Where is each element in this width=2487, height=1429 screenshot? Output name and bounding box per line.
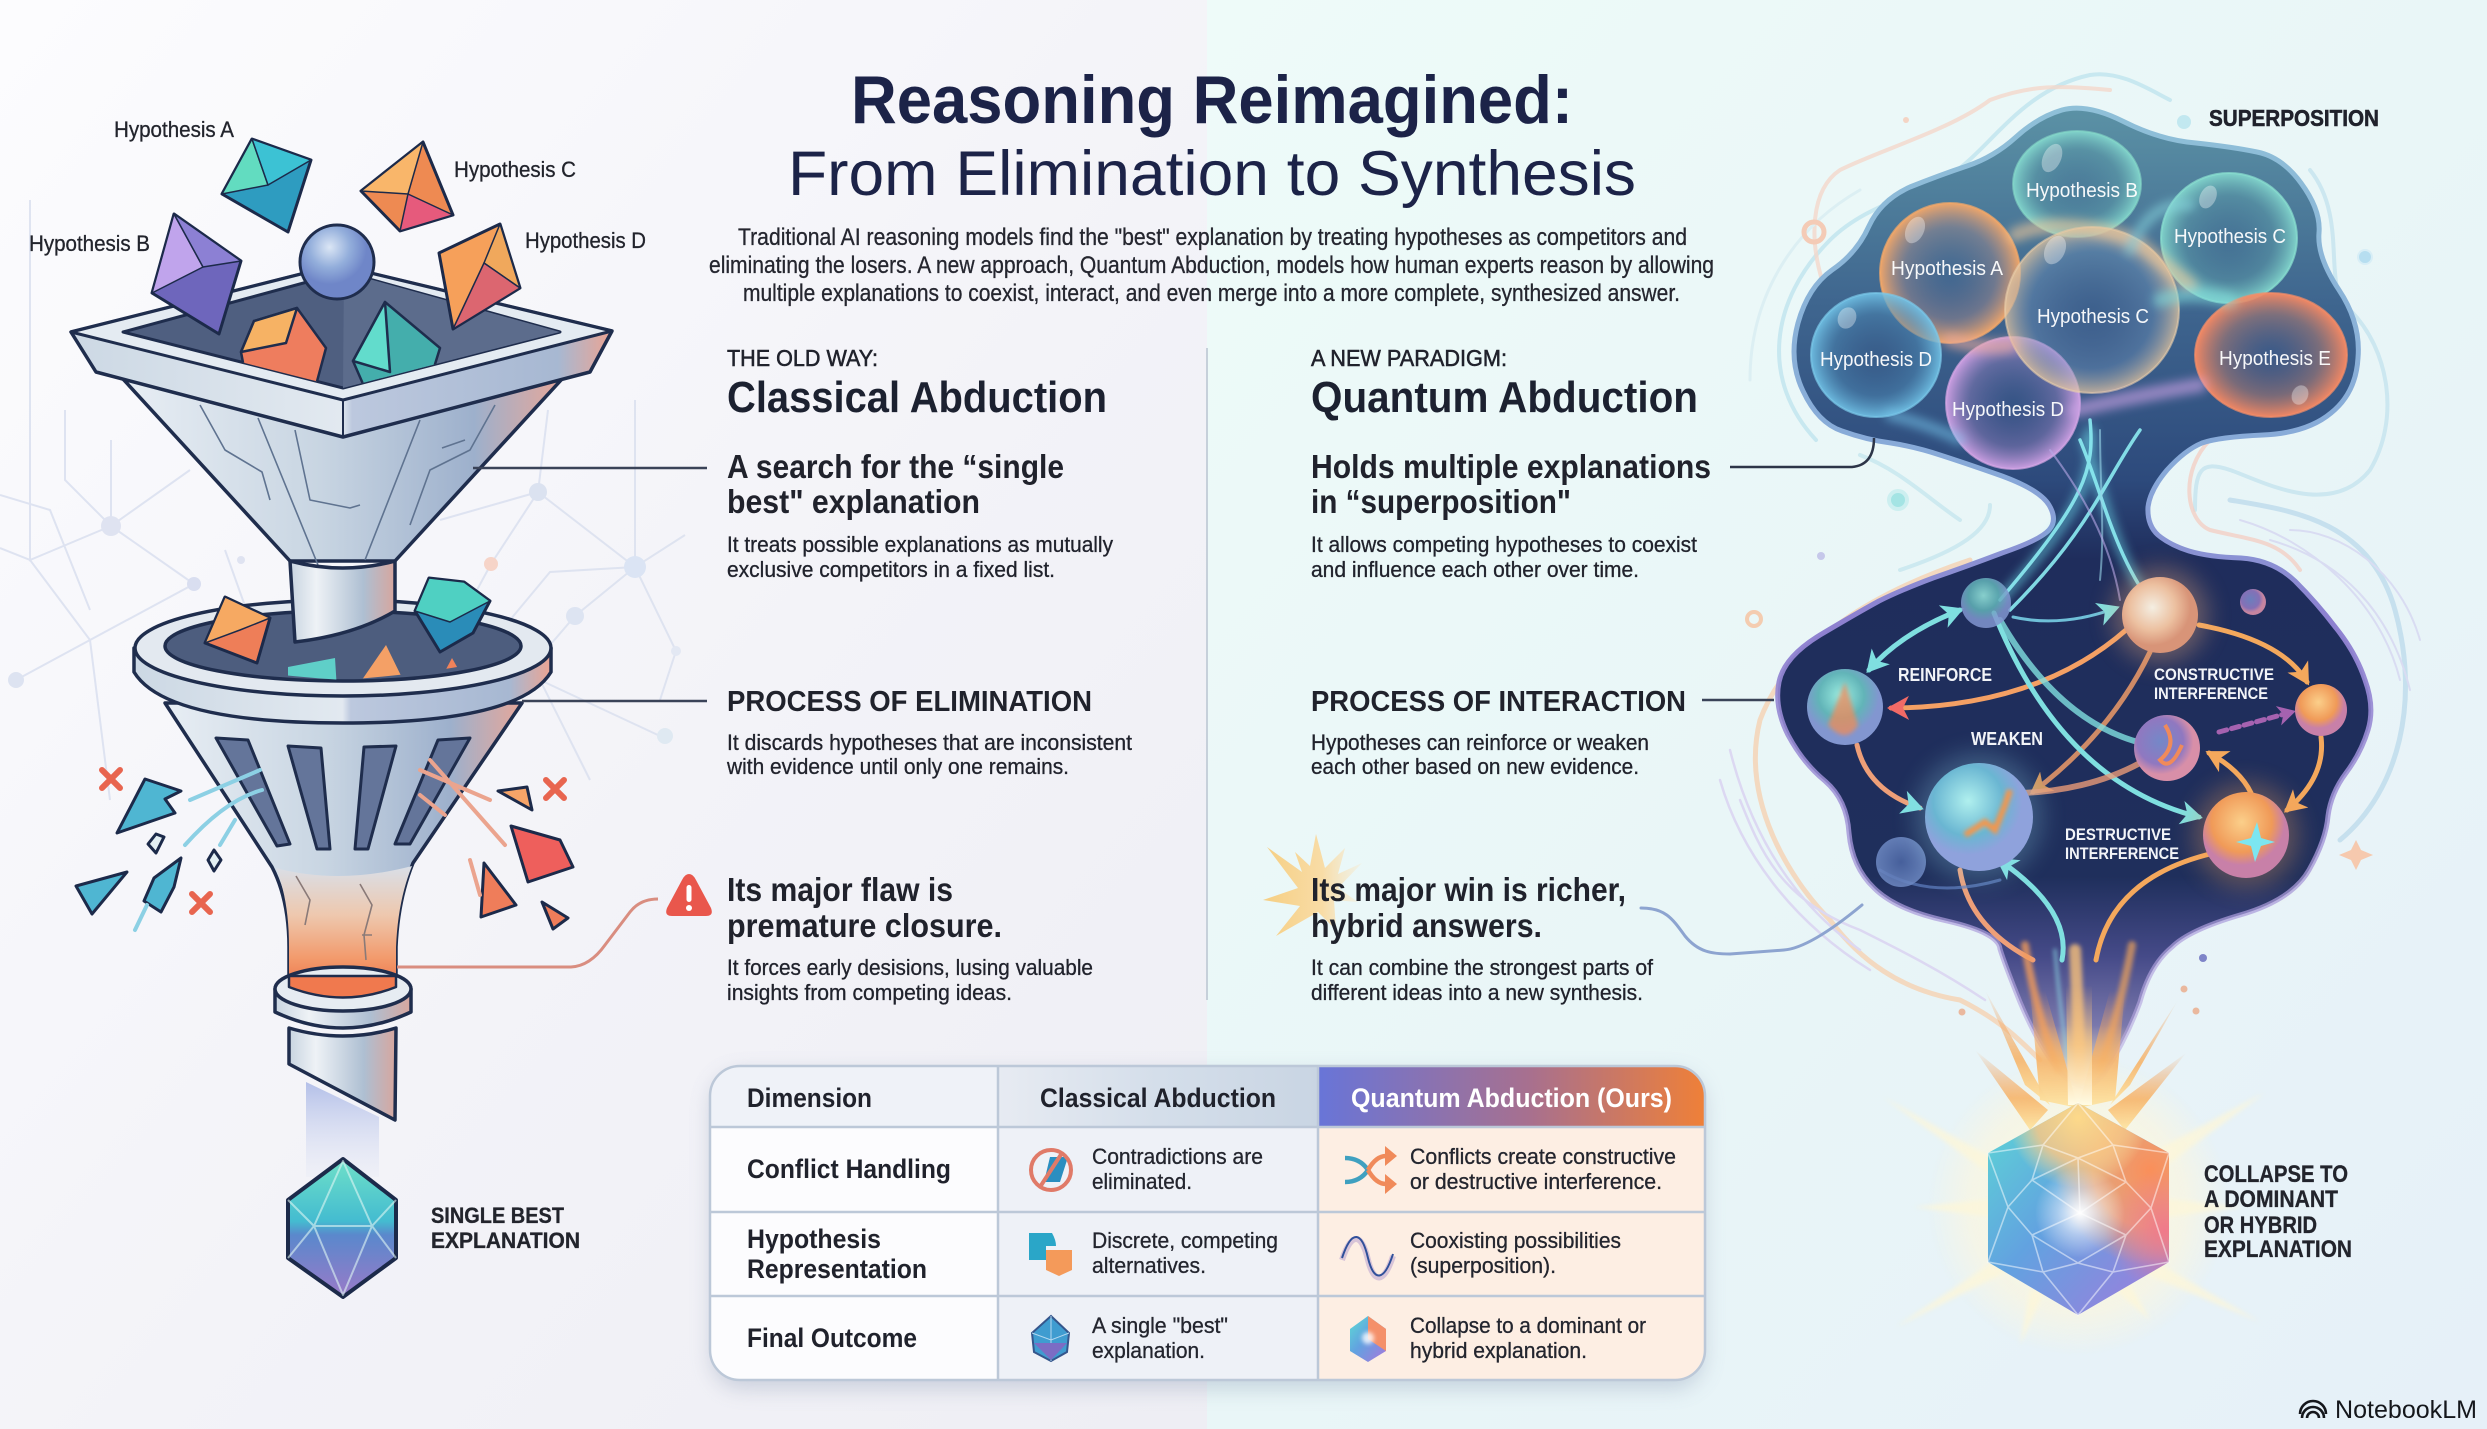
table row labels: Hypothesis [747, 1224, 881, 1254]
streams through stem [2000, 420, 2160, 615]
upper funnel neck [290, 561, 395, 642]
title line 1: Reasoning Reimagined: [851, 62, 1573, 138]
table cell text: Contradictions are [1092, 1144, 1263, 1169]
superposition hypothesis labels: Hypothesis D [1820, 349, 1932, 371]
heading: quantum abduction: Quantum Abduction [1311, 373, 1698, 422]
table header: Quantum Abduction (Ours) [1351, 1083, 1672, 1113]
label: single best explanation: EXPLANATION [431, 1228, 580, 1253]
flames [1975, 985, 2186, 1130]
icon: hybrid gem [1350, 1316, 1386, 1362]
bubble E [2195, 293, 2347, 417]
point 3: Its major win is richer, [1311, 871, 1626, 908]
table cell text: Discrete, competing [1092, 1228, 1278, 1253]
eyebrow: the old way: THE OLD WAY: [727, 345, 878, 371]
network nodes [8, 483, 681, 744]
label: collapse explanation: OR HYBRID [2204, 1212, 2317, 1239]
point 1: and influence each other over time. [1311, 557, 1639, 582]
point 2: each other based on new evidence. [1311, 754, 1639, 779]
node: small top right [2240, 589, 2266, 615]
table row labels: Conflict Handling [747, 1154, 951, 1184]
title line 2: From Elimination to Synthesis [788, 139, 1636, 209]
background: left half [0, 0, 1207, 1429]
table cell text: A single "best" [1092, 1313, 1228, 1338]
eyebrow: a new paradigm: A NEW PARADIGM: [1311, 345, 1507, 371]
superposition hypothesis labels: Hypothesis D [1952, 399, 2064, 421]
interaction labels: REINFORCE [1898, 665, 1992, 685]
funnel sphere [300, 225, 374, 299]
node: middle purple [2134, 715, 2200, 781]
highlights [1834, 141, 2311, 407]
panel: quantum abduction text [1311, 345, 1711, 1005]
interaction bubbles [1807, 567, 2347, 888]
label: single best explanation: SINGLE BEST [431, 1203, 565, 1228]
point 2: with evidence until only one remains. [726, 754, 1069, 779]
center divider [1206, 348, 1208, 1000]
bubble C centre [2005, 227, 2179, 393]
hypothesis gem D [439, 224, 520, 329]
upper funnel cone [123, 379, 562, 561]
superposition hypothesis labels: Hypothesis B [2026, 180, 2138, 202]
bubble merge ribbons [1890, 205, 2230, 440]
neck cracks [296, 876, 372, 960]
table header: Classical Abduction [1040, 1083, 1276, 1113]
panel: classical abduction text [726, 345, 1132, 1005]
point 3: Its major flaw is [727, 871, 953, 908]
table cell text: or destructive interference. [1410, 1169, 1662, 1194]
label: hypothesis A: Hypothesis A [114, 117, 234, 142]
intro paragraph [709, 224, 1714, 307]
label: collapse explanation: EXPLANATION [2204, 1236, 2352, 1263]
red x marks [102, 770, 564, 912]
point 1: It treats possible explanations as mutually [727, 532, 1113, 557]
superposition bubbles [1811, 131, 2347, 469]
node: bottom right orange [2193, 782, 2299, 888]
bubble A [1880, 203, 2020, 343]
single best gem [288, 1159, 396, 1297]
table row labels: Final Outcome [747, 1323, 917, 1353]
sparkle [2339, 840, 2373, 870]
gem pieces inside lower funnel [288, 645, 457, 680]
table header: Dimension [747, 1083, 872, 1113]
table row labels: Representation [747, 1254, 927, 1284]
superposition hypothesis labels: Hypothesis C [2174, 226, 2286, 248]
point 1 [1311, 448, 1711, 582]
point 1: A search for the “single [727, 448, 1064, 485]
interaction labels: INTERFERENCE [2154, 685, 2268, 703]
point 1 [727, 448, 1113, 582]
hypothesis gem A [222, 139, 311, 232]
interaction labels: INTERFERENCE [2065, 845, 2179, 863]
small floating dots [1747, 115, 2372, 1016]
lower tree streaks [2025, 945, 2132, 1080]
table cell text: explanation. [1092, 1338, 1205, 1363]
lower funnel cone [165, 703, 522, 994]
node: left big [1807, 669, 1883, 745]
point 2 [1311, 686, 1686, 779]
left funnel illustration [71, 139, 612, 1297]
title [788, 62, 1636, 209]
node: top left [1961, 578, 2011, 628]
beam [306, 1082, 379, 1177]
label: single best explanation [431, 1203, 580, 1253]
point 1: exclusive competitors in a fixed list. [727, 557, 1055, 582]
icon: wave [1342, 1237, 1393, 1278]
icon: starburst [1263, 834, 1362, 936]
logo mark [2300, 1401, 2326, 1418]
point 1: It allows competing hypotheses to coexist [1311, 532, 1697, 557]
interaction labels: WEAKEN [1971, 729, 2043, 749]
lower funnel slots [216, 738, 470, 849]
glow [1928, 1055, 2228, 1355]
point 3: hybrid answers. [1311, 907, 1542, 944]
gem dropped in ring: orange [205, 597, 270, 663]
label: hypothesis B: Hypothesis B [29, 231, 150, 256]
bubble B [2013, 131, 2141, 237]
table cell text: Cooxisting possibilities [1410, 1228, 1621, 1253]
point 3: premature closure. [727, 907, 1002, 944]
node: right orange [2295, 684, 2347, 736]
point 3 [1311, 871, 1654, 1005]
connector: flaw line [397, 899, 658, 967]
collapse burst [1883, 985, 2264, 1355]
icon: single gem [1032, 1316, 1069, 1361]
spout [289, 1028, 396, 1120]
lower funnel top ring [134, 600, 551, 723]
network pattern behind funnel [0, 200, 685, 800]
cone panel lines [200, 405, 495, 565]
label: collapse explanation [2204, 1161, 2352, 1263]
interaction arrows [1857, 608, 2322, 960]
label: collapse explanation: COLLAPSE TO [2204, 1161, 2348, 1188]
superposition hypothesis labels: Hypothesis A [1891, 258, 2004, 280]
point 2: It discards hypotheses that are inconsistent [727, 730, 1132, 755]
point 2: PROCESS OF INTERACTION [1311, 686, 1686, 718]
connector: search line [473, 467, 707, 469]
hypothesis gem C [361, 142, 453, 231]
icon: discrete blocks [1029, 1233, 1072, 1276]
shards: blue [76, 779, 221, 914]
node: constructive top [2112, 567, 2208, 663]
superposition hypothesis labels: Hypothesis E [2219, 348, 2331, 370]
heading: classical abduction: Classical Abduction [727, 373, 1107, 422]
point 2: Hypotheses can reinforce or weaken [1311, 730, 1649, 755]
table cell text: Collapse to a dominant or [1410, 1313, 1646, 1338]
intro paragraph: multiple explanations to coexist, interact, and even merge into a more complete, synthesized answer. [743, 280, 1680, 307]
icon: shuffle [1345, 1146, 1397, 1194]
heated neck [276, 866, 412, 989]
point 3: It forces early desisions, lusing valuable [727, 955, 1093, 980]
notebooklm logo: NotebookLM [2335, 1396, 2477, 1424]
gem dropped in ring: teal cube [415, 578, 490, 652]
comparison table shadow [712, 1074, 1703, 1388]
bubble C right [2161, 173, 2297, 303]
point 3: It can combine the strongest parts of [1311, 955, 1654, 980]
connector: elimination line [522, 700, 707, 702]
superposition hypothesis labels [1820, 180, 2331, 421]
icon: eliminated [1031, 1150, 1071, 1190]
shards: orange [481, 787, 573, 929]
intro paragraph: eliminating the losers. A new approach, Quantum Abduction, models how human experts reason by allowing [709, 252, 1714, 279]
label: superposition: SUPERPOSITION [2209, 105, 2379, 131]
connector: superposition line [1730, 438, 1874, 467]
interaction labels: CONSTRUCTIVE [2154, 666, 2274, 684]
intro paragraph: Traditional AI reasoning models find the "best" explanation by treating hypotheses as competitors and [738, 224, 1687, 251]
bubble D bottom [1946, 337, 2080, 469]
table cell text [1092, 1144, 1676, 1363]
point 3: insights from competing ideas. [727, 980, 1012, 1005]
hypothesis gem B [152, 214, 241, 334]
bubble D left [1811, 293, 1941, 417]
label: hypothesis D: Hypothesis D [525, 228, 646, 253]
tree: superposition and interaction cloud [1778, 108, 2371, 1086]
faint wisps around tree [1641, 74, 2420, 1060]
rays [1883, 1093, 2264, 1345]
interaction labels: DESTRUCTIVE [2065, 826, 2171, 844]
label: collapse explanation: A DOMINANT [2204, 1186, 2338, 1213]
table cell text: eliminated. [1092, 1169, 1192, 1194]
connector: interaction line [1702, 699, 1774, 701]
gems inside upper funnel [240, 300, 442, 383]
point 2 [726, 686, 1132, 779]
node: small blue [1876, 837, 1926, 887]
table cell text: Conflicts create constructive [1410, 1144, 1676, 1169]
point 1: best" explanation [727, 483, 980, 520]
table cell text: hybrid explanation. [1410, 1338, 1587, 1363]
superposition hypothesis labels: Hypothesis C [2037, 306, 2149, 328]
point 3: different ideas into a new synthesis. [1311, 980, 1643, 1005]
point 1: Holds multiple explanations [1311, 448, 1711, 485]
table row labels [747, 1154, 951, 1353]
node: big weaken [1915, 753, 2043, 881]
label: hypothesis C: Hypothesis C [454, 157, 576, 182]
background: right half [1207, 0, 2487, 1429]
point 1: in “superposition" [1311, 483, 1571, 520]
interaction labels [1898, 665, 2274, 863]
table cell text: (superposition). [1410, 1253, 1556, 1278]
point 2: PROCESS OF ELIMINATION [727, 686, 1092, 718]
table cell text: alternatives. [1092, 1253, 1206, 1278]
spray streaks [135, 760, 505, 930]
comparison table [710, 1066, 1705, 1380]
final hybrid gem [1987, 1102, 2170, 1316]
upper funnel rim [71, 265, 612, 437]
icon: warning triangle [666, 874, 712, 916]
lower collar [275, 967, 411, 1028]
table header [747, 1083, 1672, 1113]
point 3 [727, 871, 1093, 1005]
